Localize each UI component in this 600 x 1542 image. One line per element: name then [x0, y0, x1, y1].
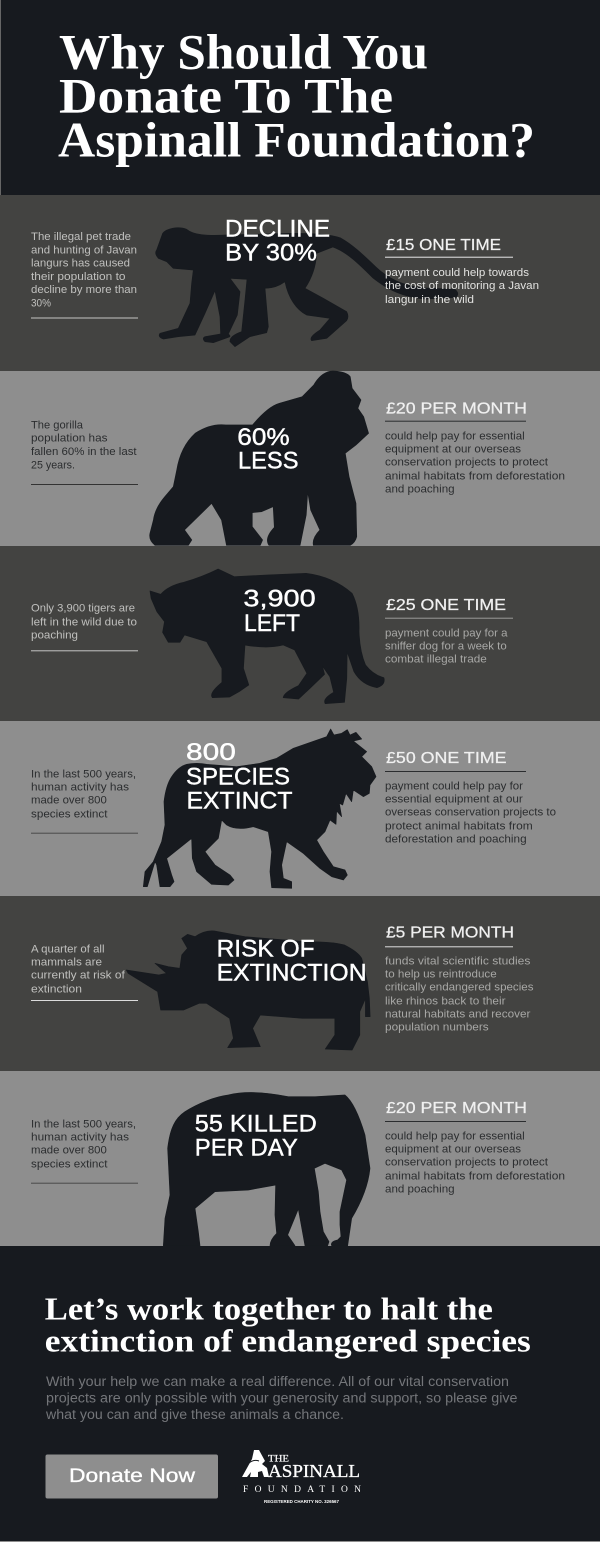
- text: gorilla fact: fallen 60% in the last: [31, 446, 137, 458]
- text: lion fact: In the last 500 years,: [31, 769, 136, 781]
- text: rhino fact: extinction: [31, 984, 82, 996]
- donation: £25 one time: payment could pay for a: [385, 628, 508, 640]
- donation: £5 per month: to help us reintroduce: [385, 969, 497, 981]
- stat: 55 killed per day: 55 KILLED: [195, 1111, 317, 1138]
- stat: 3,900 left: LEFT: [244, 610, 300, 637]
- donation: £25 one time: [385, 597, 513, 666]
- icon: lion silhouette: [143, 729, 376, 888]
- donation: £15 one time: payment could help towards: [385, 267, 530, 279]
- text: langur fact: langurs has caused: [31, 258, 130, 270]
- logo: The Aspinall Foundation: REGISTERED CHARITY NO. 326567: [264, 1499, 339, 1504]
- donation: £20 per month: £20 PER MONTH: [386, 400, 527, 417]
- text: lion fact: [31, 769, 138, 834]
- stat: 60% less: [237, 424, 298, 474]
- donation: £20 per month: [385, 1100, 565, 1196]
- donation: £20 per month: [385, 400, 565, 496]
- text: elephant fact: made over 800: [31, 1145, 107, 1157]
- text: tiger fact: Only 3,900 tigers are: [31, 603, 135, 615]
- panel: rhino: [0, 896, 600, 1071]
- logo: The Aspinall Foundation: THE: [268, 1455, 289, 1465]
- text: tiger fact: [31, 603, 138, 651]
- panel: lion: [0, 721, 600, 896]
- stat: 60% less: 60%: [237, 424, 290, 451]
- donate button: Donate Now: [69, 1466, 195, 1487]
- donation: £50 one time: £50 ONE TIME: [386, 750, 506, 767]
- text: rhino fact: A quarter of all: [31, 944, 104, 956]
- footer text: With your help we can make a real difference. All of our vital conservation: [46, 1374, 509, 1389]
- donation: £25 one time: sniffer dog for a week to: [385, 641, 507, 653]
- donation: £20 per month: animal habitats from deforestation: [385, 470, 565, 482]
- donation: £50 one time: overseas conservation projects to: [385, 807, 556, 819]
- text: gorilla fact: 25 years.: [31, 460, 75, 472]
- footer text: what you can and give these animals a chance.: [45, 1407, 344, 1422]
- donation: £20 per month: and poaching: [385, 1184, 455, 1196]
- panel: footer call to action: [0, 1246, 600, 1542]
- donation: £20 per month: conservation projects to protect: [385, 1157, 548, 1169]
- footer heading: Let’s work together to halt the: [45, 1290, 493, 1326]
- stat: risk of extinction: RISK OF: [217, 936, 315, 963]
- donation: £5 per month: population numbers: [385, 1022, 489, 1034]
- donation: £15 one time: £15 ONE TIME: [386, 237, 501, 254]
- stat: risk of extinction: EXTINCTION: [217, 960, 367, 987]
- stat: 800 species extinct: EXTINCT: [186, 787, 293, 814]
- text: gorilla fact: population has: [31, 433, 108, 445]
- header panel: [0, 0, 600, 195]
- icon: langur silhouette: [156, 228, 458, 347]
- donation: £20 per month: equipment at our overseas: [385, 444, 522, 456]
- logo: The Aspinall Foundation: ASPINALL: [268, 1461, 360, 1481]
- donation: £20 per month: animal habitats from deforestation: [385, 1171, 565, 1183]
- donation: £25 one time: combat illegal trade: [385, 654, 487, 666]
- logo: The Aspinall Foundation: FOUNDATION: [243, 1485, 361, 1495]
- stat: 800 species extinct: 800: [186, 739, 236, 766]
- text: elephant fact: species extinct: [31, 1159, 108, 1171]
- stat: risk of extinction: [217, 936, 367, 987]
- icon: tiger silhouette: [150, 569, 384, 704]
- donation: £50 one time: [385, 750, 556, 846]
- stat: 3,900 left: 3,900: [243, 586, 316, 613]
- donation: £5 per month: funds vital scientific studies: [385, 956, 531, 968]
- donation: £5 per month: critically endangered species: [385, 982, 534, 994]
- text: elephant fact: In the last 500 years,: [31, 1119, 136, 1131]
- text: gorilla fact: The gorilla: [31, 420, 84, 432]
- stat: 800 species extinct: SPECIES: [186, 763, 290, 790]
- text: gorilla fact: [31, 420, 138, 485]
- text: langur fact: The illegal pet trade: [31, 231, 131, 243]
- donation: £20 per month: equipment at our overseas: [385, 1144, 522, 1156]
- donation: £25 one time: £25 ONE TIME: [386, 597, 506, 614]
- donation: £5 per month: natural habitats and recover: [385, 1009, 531, 1021]
- panel: elephant: [0, 1071, 600, 1246]
- footer text: [45, 1374, 517, 1422]
- stat: 55 killed per day: [195, 1111, 317, 1162]
- donation: £5 per month: like rhinos back to their: [385, 996, 506, 1008]
- stat: 3,900 left: [243, 586, 316, 637]
- text: langur fact: 30%: [31, 298, 51, 310]
- text: lion fact: made over 800: [31, 795, 107, 807]
- text: lion fact: human activity has: [31, 782, 130, 794]
- text: langur fact: their population to: [31, 271, 126, 283]
- donation: £50 one time: protect animal habitats from: [385, 821, 533, 833]
- text: tiger fact: left in the wild due to: [31, 616, 137, 628]
- text: tiger fact: poaching: [31, 630, 78, 642]
- stat: 800 species extinct: [186, 739, 293, 814]
- donation: £20 per month: conservation projects to protect: [385, 457, 548, 469]
- title: Aspinall Foundation?: [58, 112, 535, 168]
- stat: decline by 30%: DECLINE: [225, 216, 330, 243]
- donation: £50 one time: essential equipment at our: [385, 794, 523, 806]
- title: [58, 23, 535, 168]
- panel: tiger: [0, 546, 600, 721]
- donation: £15 one time: the cost of monitoring a Javan: [385, 280, 539, 292]
- text: rhino fact: currently at risk of: [31, 970, 126, 982]
- stat: 60% less: LESS: [238, 447, 298, 474]
- text: langur fact: [31, 231, 138, 318]
- icon: elephant silhouette: [163, 1092, 370, 1246]
- stat: decline by 30%: BY 30%: [225, 240, 317, 267]
- donation: £20 per month: could help pay for essential: [385, 1131, 525, 1143]
- icon: gorilla and mountain: [242, 1450, 269, 1477]
- panel: gorilla: [0, 371, 600, 546]
- title: Why Should You: [59, 23, 428, 79]
- donation: £5 per month: £5 PER MONTH: [386, 925, 514, 942]
- donation: £15 one time: [385, 237, 539, 306]
- panel: Javan langur: [0, 195, 600, 371]
- icon: rhino silhouette: [126, 931, 370, 1050]
- text: elephant fact: [31, 1119, 138, 1184]
- text: rhino fact: mammals are: [31, 957, 102, 969]
- icon: gorilla silhouette: [150, 371, 369, 545]
- donation: £20 per month: and poaching: [385, 484, 455, 496]
- text: lion fact: species extinct: [31, 809, 108, 821]
- donation: £20 per month: £20 PER MONTH: [386, 1100, 527, 1117]
- donation: £5 per month: [385, 925, 534, 1034]
- text: langur fact: and hunting of Javan: [31, 245, 137, 257]
- footer text: projects are only possible with your generosity and support, so please give: [46, 1391, 518, 1406]
- stat: 55 killed per day: PER DAY: [195, 1135, 298, 1162]
- logo: The Aspinall Foundation: [242, 1450, 361, 1504]
- donation: £15 one time: langur in the wild: [385, 294, 474, 306]
- donate button: [46, 1454, 218, 1498]
- text: langur fact: decline by more than: [31, 284, 137, 296]
- donation: £50 one time: deforestation and poaching: [385, 834, 527, 846]
- footer heading: extinction of endangered species: [45, 1323, 531, 1359]
- footer heading: [45, 1290, 531, 1359]
- stat: decline by 30%: [225, 216, 330, 267]
- donation: £50 one time: payment could help pay for: [385, 781, 523, 793]
- text: rhino fact: [31, 944, 138, 1001]
- title: Donate To The: [59, 68, 393, 124]
- donation: £20 per month: could help pay for essential: [385, 431, 525, 443]
- text: elephant fact: human activity has: [31, 1132, 130, 1144]
